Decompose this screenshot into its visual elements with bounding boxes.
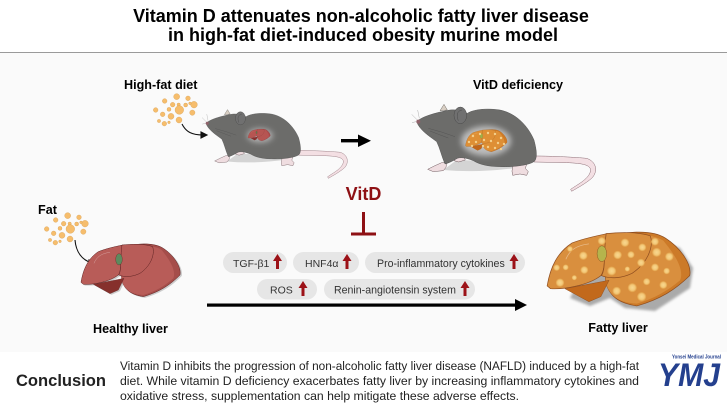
arrow: diet to deficiency	[341, 134, 371, 147]
fatty liver inside second mouse	[461, 126, 511, 156]
VitD label: VitD	[346, 184, 381, 204]
conclusion text: Vitamin D inhibits the progression of non-alcoholic fatty liver disease (NAFLD) induced by a high-fat	[120, 359, 640, 373]
label: high-fat diet: High-fat diet	[124, 78, 198, 92]
logo: YMJ: Yonsei Medical Journal	[672, 354, 722, 360]
label: healthy liver: Healthy liver	[93, 322, 168, 336]
inhibition symbol	[351, 212, 376, 236]
fat deposits	[553, 237, 674, 301]
title: Vitamin D attenuates non-alcoholic fatty liver disease	[133, 6, 589, 26]
pill: pro-inflammatory cytokines: Pro-inflammatory cytokines	[377, 258, 505, 270]
label: VitD deficiency: VitD deficiency	[473, 78, 563, 92]
conclusion text: diet. While vitamin D deficiency exacerbates fatty liver by increasing inflammatory cytokines and	[120, 374, 639, 388]
pill: HNF4α	[293, 252, 359, 273]
logo: YMJ: YMJ	[658, 357, 721, 393]
liver inside first mouse	[247, 128, 273, 142]
arrow: diet to mouse	[182, 124, 207, 138]
conclusion heading: Conclusion	[16, 372, 106, 390]
pill: HNF4α: HNF4α	[305, 258, 338, 270]
pill: pro-inflammatory cytokines	[365, 252, 525, 273]
pill: renin-angiotensin system: Renin-angiotensin system	[334, 284, 456, 296]
label: fatty liver: Fatty liver	[588, 321, 648, 335]
arrow: fat to liver	[75, 240, 94, 266]
icon: fat droplets	[44, 213, 88, 245]
mouse: high-fat diet	[202, 110, 347, 178]
background panel	[0, 53, 727, 352]
conclusion text	[120, 359, 640, 403]
pill: TGF-β1	[223, 252, 287, 273]
arrow: healthy to fatty liver	[207, 299, 527, 311]
label: fat: Fat	[38, 203, 58, 217]
pill: ROS	[257, 279, 317, 300]
fatty liver	[547, 232, 693, 311]
title line two: in high-fat diet-induced obesity murine model	[168, 25, 558, 45]
pill: ROS: ROS	[270, 284, 293, 296]
healthy liver	[81, 244, 182, 298]
icon: fat droplets for diet	[153, 94, 197, 126]
mouse: VitD deficiency	[412, 104, 596, 191]
pill: renin-angiotensin system	[324, 279, 475, 300]
conclusion text: oxidative stress, supplementation can help mitigate these adverse effects.	[120, 389, 519, 403]
pill: TGF-β1: TGF-β1	[233, 258, 270, 270]
